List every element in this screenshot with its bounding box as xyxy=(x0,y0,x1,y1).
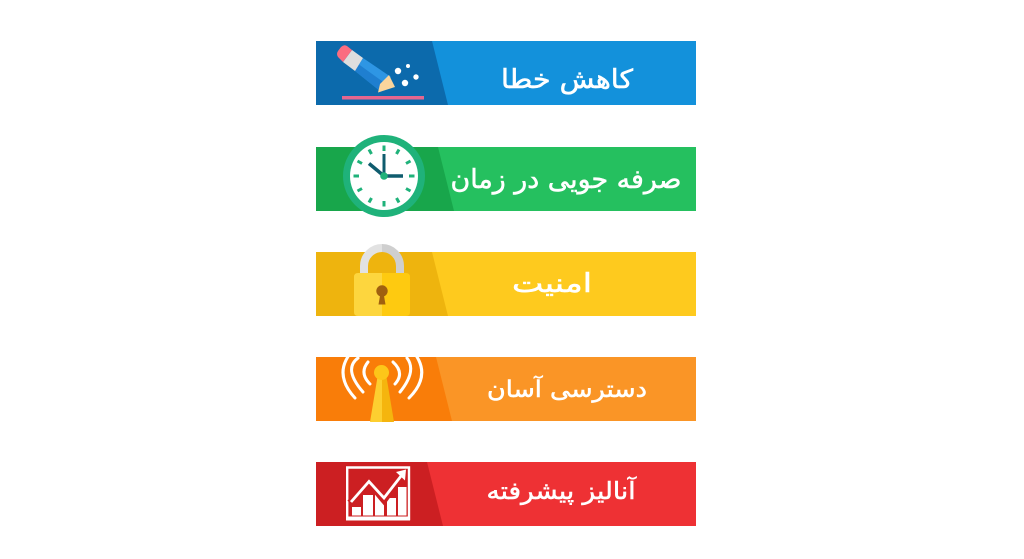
label: امنیت xyxy=(512,269,592,299)
panel: advanced analytics xyxy=(316,462,696,526)
icon: chart xyxy=(346,468,410,520)
label: آنالیز پیشرفته xyxy=(486,476,637,505)
panel: easy access xyxy=(316,348,696,422)
label: صرفه جویی در زمان xyxy=(450,165,682,195)
icon: pencil xyxy=(337,45,419,92)
underline xyxy=(342,96,424,100)
icon: padlock xyxy=(354,248,410,316)
icon: antenna xyxy=(343,348,422,422)
icon: clock xyxy=(343,135,425,217)
label: کاهش خطا xyxy=(501,65,634,95)
panel: reduce errors xyxy=(316,41,696,105)
panel: security xyxy=(316,248,696,316)
label: دسترسی آسان xyxy=(487,375,647,403)
panel: time saving xyxy=(316,135,696,217)
